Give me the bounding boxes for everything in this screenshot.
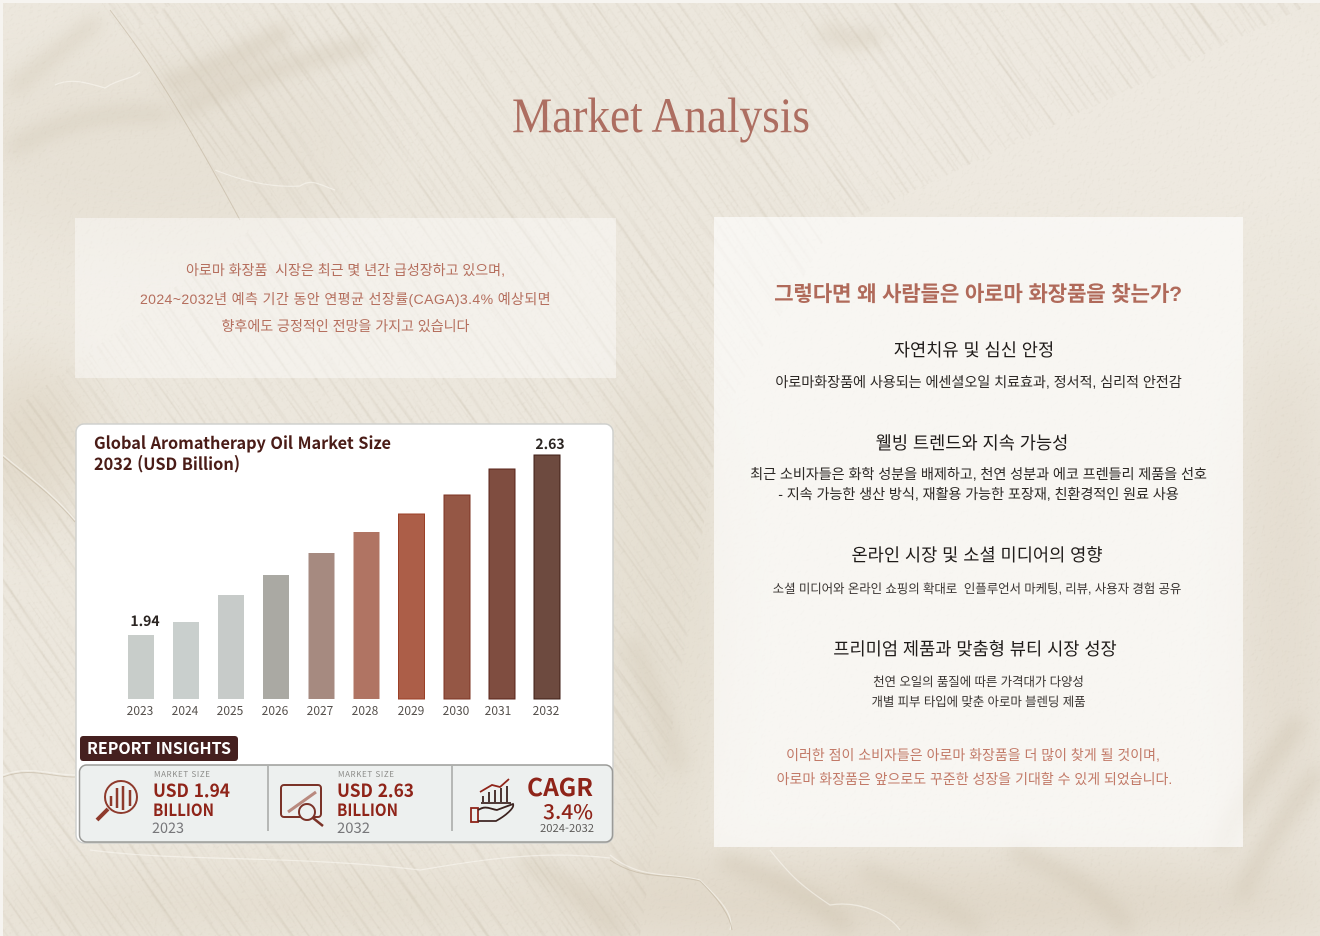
stat: 2023 market size: BILLION (153, 796, 214, 821)
chart title (94, 429, 391, 475)
value labels: 2.63 (535, 434, 565, 454)
panel: reasons (714, 217, 1243, 847)
stat: 2032 market size (281, 769, 414, 838)
stat: CAGR: 3.4% (543, 796, 593, 825)
reason 1: 아로마화장품에 사용되는 에센셜오일 치료효과, 정서적, 심리적 안전감 (775, 375, 1182, 391)
insights strip (80, 765, 612, 842)
year axis labels: 2030 (443, 702, 470, 719)
year axis labels: 2032 (533, 702, 560, 719)
year axis labels: 2024 (172, 702, 199, 719)
bar chart (127, 434, 565, 719)
panel: intro text (75, 218, 616, 378)
intro line 3: 향후에도 긍정적인 전망을 가지고 있습니다 (222, 318, 469, 334)
stat: 2032 market size: USD 2.63 (337, 777, 414, 803)
stat: CAGR: 2024-2032 (540, 821, 594, 836)
stat: 2023 market size: 2023 (152, 817, 184, 838)
reason 4: 개별 피부 타입에 맞춘 아로마 블렌딩 제품 (871, 695, 1086, 709)
conclusion: 아로마 화장품은 앞으로도 꾸준한 성장을 기대할 수 있게 되었습니다. (777, 771, 1172, 787)
intro line 1: 아로마 화장품 시장은 최근 몇 년간 급성장하고 있으며, (186, 262, 505, 278)
value labels (130, 434, 565, 631)
icon: magnifier with bars (97, 781, 137, 820)
report insights badge: REPORT INSIGHTS (87, 735, 231, 759)
icon: report with magnifier (281, 785, 323, 826)
year axis labels: 2023 (127, 702, 153, 719)
year axis labels: 2029 (398, 702, 424, 719)
conclusion: 이러한 점이 소비자들은 아로마 화장품을 더 많이 찾게 될 것이며, (786, 747, 1160, 763)
reason 4 (833, 639, 1117, 709)
year axis labels: 2025 (217, 702, 244, 719)
stat: 2032 market size: MARKET SIZE (338, 769, 394, 780)
chart title: Global Aromatherapy Oil Market Size (94, 429, 391, 454)
value labels: 1.94 (130, 611, 160, 631)
reason 3 (773, 545, 1181, 596)
reason 1 (775, 340, 1182, 391)
year axis labels (127, 702, 560, 719)
year axis labels: 2026 (262, 702, 289, 719)
stat: 2023 market size: USD 1.94 (153, 777, 230, 803)
reason 2: - 지속 가능한 생산 방식, 재활용 가능한 포장재, 친환경적인 원료 사용 (778, 487, 1179, 503)
stat: CAGR (471, 768, 594, 836)
conclusion (777, 747, 1172, 787)
reason 4: 프리미엄 제품과 맞춤형 뷰티 시장 성장 (833, 639, 1117, 659)
reason 2 (750, 433, 1207, 503)
reason 2: 최근 소비자들은 화학 성분을 배제하고, 천연 성분과 에코 프렌들리 제품을 선호 (750, 467, 1207, 483)
stat: CAGR: CAGR (527, 768, 593, 803)
year axis labels: 2027 (307, 702, 334, 719)
stat: 2032 market size: BILLION (337, 796, 398, 821)
reason 4: 천연 오일의 품질에 따른 가격대가 다양성 (873, 675, 1084, 689)
chart title: 2032 (USD Billion) (94, 450, 240, 475)
reason 3: 소셜 미디어와 온라인 쇼핑의 확대로 인플루언서 마케팅, 리뷰, 사용자 경험 공유 (773, 582, 1181, 596)
year axis labels: 2028 (352, 702, 379, 719)
intro line 2: 2024~2032년 예측 기간 동안 연평균 선장률(CAGA)3.4% 예상되면 (140, 291, 551, 307)
stat: 2023 market size (97, 769, 230, 838)
panel: market size chart card (75, 423, 614, 844)
reason 2: 웰빙 트렌드와 지속 가능성 (876, 433, 1068, 453)
reason 3: 온라인 시장 및 소셜 미디어의 영향 (851, 545, 1103, 565)
stat: 2023 market size: MARKET SIZE (154, 769, 210, 780)
reason 1: 자연치유 및 심신 안정 (894, 340, 1054, 360)
plaster ridge lines (3, 72, 900, 930)
stat: 2032 market size: 2032 (337, 817, 370, 838)
year axis labels: 2031 (485, 702, 511, 719)
icon: hand with growth chart (471, 779, 513, 822)
reasons heading: 그렇다면 왜 사람들은 아로마 화장품을 찾는가? (774, 283, 1182, 306)
